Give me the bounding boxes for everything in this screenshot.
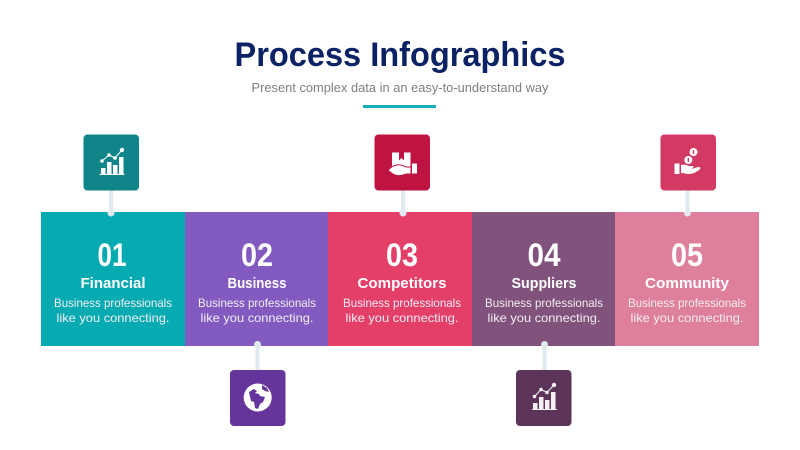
heading: Community: Community — [645, 275, 730, 292]
text: Competitors description: like you connecting. — [346, 311, 458, 325]
number 04: 04 — [528, 237, 561, 273]
text: Business description: Business professionals — [198, 296, 316, 310]
connector: 03 — [400, 190, 406, 216]
text: Financial description: Business professionals — [54, 296, 172, 310]
connector: 04 — [541, 341, 548, 371]
text: Business description: like you connecting. — [200, 311, 314, 325]
panel: 05 Community — [615, 212, 759, 346]
connector: 02 — [254, 341, 261, 371]
heading: Business: Business — [228, 275, 286, 292]
number 05: 05 — [671, 237, 703, 273]
number 02: 02 — [241, 237, 273, 273]
text: Suppliers description: Business professionals — [485, 296, 603, 310]
icon: growth chart (plum) — [516, 370, 572, 426]
text: Community description: like you connecting. — [630, 311, 744, 325]
heading: Financial: Financial — [80, 275, 146, 292]
icon: growth chart (teal) — [84, 134, 139, 190]
connector: 05 — [684, 190, 691, 216]
accent underline — [363, 105, 436, 108]
connector: 01 — [108, 190, 114, 216]
icon: hand with coins (rose) — [660, 134, 716, 190]
text: Financial description: like you connecting. — [56, 311, 170, 325]
subtitle: Present complex data in an easy-to-understand way — [252, 80, 549, 95]
icon: globe (purple) — [230, 370, 286, 426]
panel: 02 Business — [185, 212, 328, 346]
text: Suppliers description: like you connecting. — [488, 311, 600, 325]
title: Process Infographics — [234, 36, 566, 74]
heading: Suppliers: Suppliers — [512, 275, 576, 292]
panel: 03 Competitors — [328, 212, 472, 346]
text: Competitors description: Business professionals — [343, 296, 461, 310]
panel: 04 Suppliers — [472, 212, 615, 346]
text: Community description: Business professionals — [628, 296, 746, 310]
number 01: 01 — [98, 237, 126, 273]
heading: Competitors: Competitors — [358, 275, 446, 292]
panel: 01 Financial — [41, 212, 185, 346]
number 03: 03 — [386, 237, 418, 273]
icon: hand with building (crimson) — [374, 134, 430, 190]
